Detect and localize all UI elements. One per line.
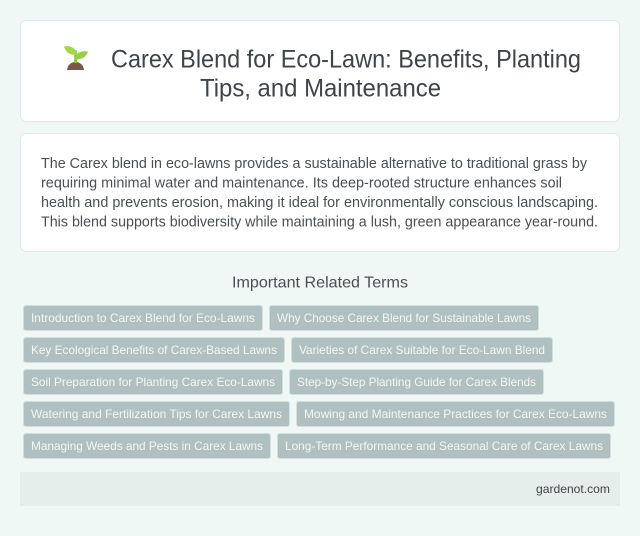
chip: Watering and Fertilization Tips for Carex Lawns (31, 407, 282, 421)
chip (24, 402, 290, 426)
footer (20, 472, 620, 506)
chip: Mowing and Maintenance Practices for Carex Eco-Lawns (304, 407, 607, 421)
chip (270, 306, 538, 330)
panel: introduction (20, 134, 620, 252)
intro text: requiring minimal water and maintenance. Its deep-rooted structure enhances soil (41, 176, 562, 192)
chip (290, 370, 544, 394)
chip: Introduction to Carex Blend for Eco-Lawns (31, 311, 255, 325)
footer source text: gardenot.com (536, 482, 610, 496)
intro text: health and prevents erosion, making it ideal for environmentally conscious landscaping. (41, 195, 598, 211)
chip (24, 338, 284, 362)
chip (292, 338, 552, 362)
chip: Step-by-Step Planting Guide for Carex Blends (297, 375, 536, 389)
chip (24, 306, 262, 330)
panel: title header (20, 20, 620, 122)
chip (24, 434, 270, 458)
icon: sprout (64, 46, 88, 70)
chip (296, 402, 614, 426)
chip: Key Ecological Benefits of Carex-Based Lawns (31, 343, 277, 357)
chip (24, 370, 282, 394)
chip (278, 434, 610, 458)
chip: Managing Weeds and Pests in Carex Lawns (31, 439, 263, 453)
intro text: This blend supports biodiversity while maintaining a lush, green appearance year-round. (41, 214, 598, 230)
related term chips (24, 306, 614, 458)
chip: Why Choose Carex Blend for Sustainable Lawns (277, 311, 531, 325)
chip: Long-Term Performance and Seasonal Care of Carex Lawns (285, 439, 603, 453)
title: Tips, and Maintenance (200, 74, 441, 102)
chip: Varieties of Carex Suitable for Eco-Lawn Blend (299, 343, 545, 357)
chip: Soil Preparation for Planting Carex Eco-Lawns (31, 375, 275, 389)
intro text: The Carex blend in eco-lawns provides a sustainable alternative to traditional grass by (41, 156, 588, 172)
heading: related terms: Important Related Terms (232, 274, 408, 292)
title: Carex Blend for Eco-Lawn: Benefits, Planting (111, 46, 581, 74)
